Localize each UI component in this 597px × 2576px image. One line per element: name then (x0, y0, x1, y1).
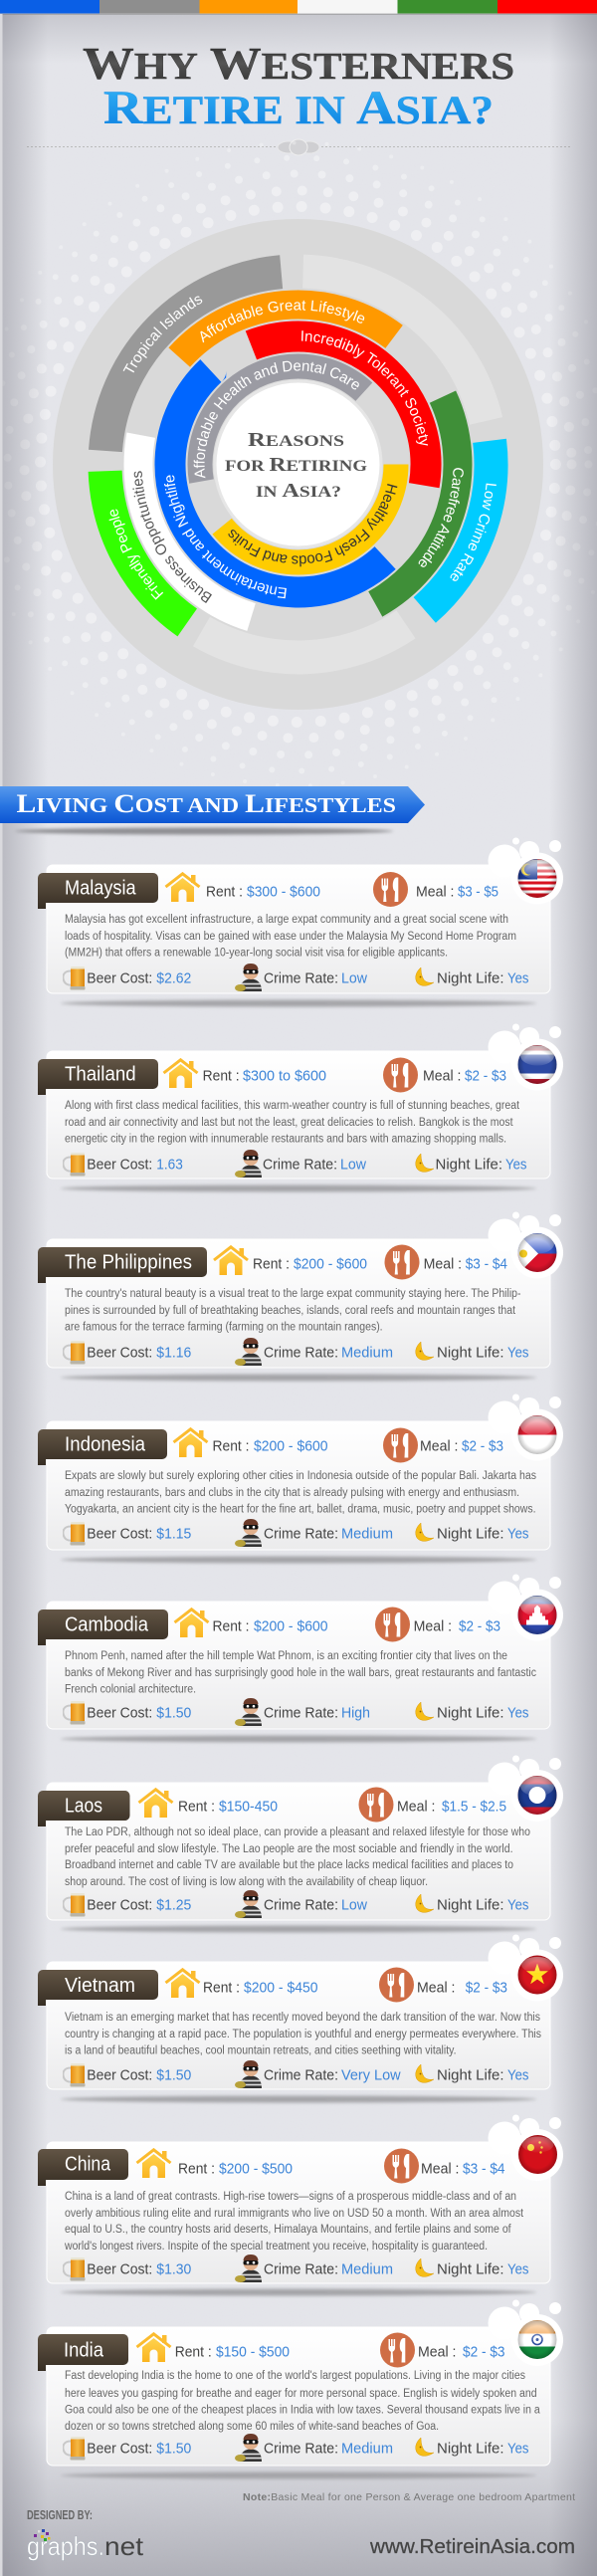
halftone dots background (0, 143, 597, 786)
description (65, 1288, 521, 1334)
stats row: Night Life: (437, 1897, 503, 1913)
stats row: $1.50 (156, 2441, 191, 2457)
stats row: Low (340, 1157, 366, 1173)
description (65, 1470, 536, 1515)
rent: Rent : (203, 1979, 240, 1997)
stats row (63, 1519, 529, 1547)
description: Expats are slowly but surely exploring other cities in Indonesia outside of the popular Bali. Jakarta has (65, 1470, 536, 1482)
flag: Thailand (517, 1045, 557, 1085)
rent: $150-450 (219, 1798, 278, 1816)
ring segment: Affordable Health and Dental Care: Affordable Health and Dental Care (193, 360, 359, 478)
meal (379, 1967, 507, 2003)
flag: Cambodia (517, 1595, 557, 1634)
stats row (63, 964, 529, 991)
rent (163, 1060, 326, 1088)
description: equal to U.S., the country hosts arid deserts, Himalaya Mountains, and fertile plains and some of (65, 2224, 511, 2236)
rent (173, 1429, 328, 1457)
stats row: Beer Cost: (87, 1897, 152, 1913)
description: Vietnam is an emerging market that has recently moved beyond the dark transition of the war. Now this (65, 2012, 540, 2024)
stats row: Crime Rate: (263, 1157, 337, 1173)
meal: $2 - $3 (459, 1618, 500, 1634)
rent: Rent : (206, 884, 243, 900)
meal (375, 1607, 500, 1642)
stats row: $1.50 (156, 1704, 191, 1722)
rent: $150 - $500 (216, 2343, 290, 2361)
meal (358, 1788, 506, 1822)
card: Vietnam (38, 1935, 563, 2102)
description: China is a land of great contrasts. High-rise towers—signs of a prosperous middle-class and of an (65, 2191, 516, 2203)
description: Phnom Penh, named after the hill temple Wat Phnom, is an exciting frontier city that lives on the (65, 1650, 507, 1662)
stats row: Crime Rate: (264, 2066, 338, 2084)
meal: Meal : (416, 884, 454, 900)
meal: Meal : (421, 2160, 460, 2178)
name tab (38, 1059, 158, 1095)
meal: Meal : (397, 1798, 436, 1816)
meal: Meal : (417, 1979, 456, 1997)
ring segment: Low Crime Rate (414, 438, 508, 623)
stats row: $1.50 (156, 2066, 191, 2084)
flag: Indonesia (517, 1415, 557, 1455)
section banner: LIVING COST AND LIFESTYLES (16, 789, 396, 818)
rent: $200 - $450 (244, 1979, 318, 1997)
ring segment: Business Opportunities (123, 432, 256, 631)
card: Thailand (38, 1023, 563, 1192)
logo: graphs.net: graphs. (27, 2531, 104, 2561)
rent (139, 1790, 278, 1818)
stats row: Night Life: (437, 2066, 503, 2084)
description: is a land of beautiful beaches, cool mountain retreats, and cities seething with vitality. (65, 2044, 456, 2056)
name tab: Vietnam (65, 1975, 135, 1997)
description (64, 2191, 524, 2253)
description: road and air connectivity and last but not the least, great delicacies to relish. Bangkok is the most (65, 1117, 513, 1129)
rent: $300 - $600 (247, 884, 320, 900)
stats row: Night Life: (436, 1157, 502, 1173)
meal: $3 - $5 (458, 884, 498, 900)
designed by label: DESIGNED BY: (27, 2507, 93, 2522)
ring segment: Business Opportunities: Business Opportunities (132, 471, 212, 603)
rent: $200 - $600 (254, 1437, 328, 1455)
stats row: Night Life: (437, 969, 503, 987)
rent: $200 - $600 (254, 1618, 328, 1634)
stats row: Crime Rate: (264, 969, 338, 987)
flag: Vietnam (517, 1955, 557, 1995)
stats row: $1.16 (156, 1344, 191, 1362)
meal (380, 2333, 505, 2367)
description: The Lao PDR, although not so ideal place, can provide a pleasant and relaxed lifestyle for those who (65, 1826, 530, 1838)
stats row: Yes (507, 1897, 529, 1913)
stats row: Very Low (341, 2066, 401, 2084)
rent (165, 874, 320, 902)
rent: Rent : (253, 1256, 290, 1272)
rent (165, 1970, 318, 1998)
description (65, 1826, 530, 1888)
description: (MM2H) that offers a renewable 10-year-long social visit visa for eligible applicants. (65, 948, 448, 960)
flag: Malaysia (517, 858, 557, 898)
stats row: Night Life: (437, 1344, 503, 1362)
stats row: Yes (507, 2441, 529, 2457)
card: Malaysia (38, 838, 563, 1007)
stats row: Night Life: (437, 1525, 503, 1543)
ring segment: Friendly People: Friendly People (109, 510, 163, 600)
rent: $300 to $600 (243, 1067, 326, 1085)
meal (384, 1244, 507, 1280)
meal: $2 - $3 (466, 1979, 507, 1997)
rent: Rent : (178, 2160, 215, 2178)
description: overly ambitious ruling elite and rural immigrants who live on USD 50 a month. With an area almost (65, 2208, 524, 2220)
stats row (63, 1338, 529, 1366)
name tab (38, 1610, 168, 1645)
meal (384, 2148, 505, 2184)
meal: Meal : (420, 1437, 458, 1455)
description: here leaves you gasping for breathe and eager for more personal space. English is widely spoken and (65, 2388, 537, 2400)
colour stripe header (0, 0, 597, 15)
description: The country's natural beauty is a visual treat to the large expat community staying here. The Philip- (65, 1288, 521, 1300)
meal (383, 1427, 503, 1463)
stats row (63, 1698, 529, 1726)
stats row: Yes (507, 1525, 529, 1543)
meal: Meal : (424, 1256, 462, 1272)
centre circle: IN ASIA? (256, 480, 341, 502)
stats row: $1.15 (156, 1525, 191, 1543)
name tab: The Philippines (65, 1252, 192, 1274)
description: Yogyakarta, an ancient city is the heart for the fine art, ballet, drama, music, poetry and puppet shows. (65, 1503, 535, 1515)
stats row: Beer Cost: (87, 1157, 152, 1173)
stats row: Crime Rate: (264, 1525, 338, 1543)
ring segment: Affordable Great Lifestyle (169, 291, 403, 367)
name tab: Thailand (65, 1063, 136, 1085)
meal: $3 - $4 (466, 1256, 507, 1272)
chart base disc (53, 219, 543, 710)
stats row (63, 2254, 529, 2282)
card: Laos (38, 1756, 563, 1933)
stats row: Yes (507, 2261, 529, 2277)
description (65, 2012, 541, 2056)
ring segment: Incredibly Tolerant Society (245, 321, 442, 488)
ring segment: Carefree Attitude: Carefree Attitude (418, 468, 464, 567)
rent (137, 2150, 293, 2178)
description: country is changing at a rapid pace. The population is youthful and energy permeates everywhere. This (65, 2029, 541, 2040)
ring segment: Entertainment and Nightlife (155, 359, 396, 607)
card: China (38, 2114, 563, 2295)
name tab (38, 2149, 128, 2186)
stats row: $1.25 (156, 1897, 191, 1913)
flag: China (517, 2134, 557, 2174)
stats row: Yes (507, 1344, 529, 1362)
card: The Philippines (38, 1212, 563, 1382)
title (83, 38, 514, 134)
stats row: Night Life: (437, 2261, 503, 2277)
stats row: Crime Rate: (264, 1344, 338, 1362)
meal: Meal : (418, 2343, 456, 2361)
name tab (38, 1247, 207, 1283)
description: amazing restaurants, bars and clubs in the city that is already pulsing with energy and enthusiasm. (65, 1487, 519, 1499)
meal (373, 872, 498, 907)
meal: $3 - $4 (463, 2160, 505, 2178)
ring segment: Friendly People (88, 470, 197, 637)
stats row: Medium (341, 2441, 393, 2457)
stats row: Crime Rate: (264, 2261, 338, 2277)
name tab: China (65, 2154, 111, 2176)
stats row: High (341, 1704, 370, 1722)
description: are famous for the terrace farming (farming on the mountain ranges). (65, 1322, 383, 1334)
stats row: Beer Cost: (87, 1344, 152, 1362)
rent: $200 - $500 (219, 2160, 293, 2178)
ring segment: Tropical Islands: Tropical Islands (123, 297, 203, 372)
stats row: $2.62 (156, 969, 191, 987)
rent (175, 1610, 328, 1637)
meal: $1.5 - $2.5 (442, 1798, 506, 1816)
description: Malaysia has got excellent infrastructure, a large expat community and a great social scene with (65, 914, 508, 926)
stats row: Medium (341, 1344, 393, 1362)
ring segment: Tropical Islands (89, 255, 283, 452)
description: pines is surrounded by full of breathtaking beaches, islands, coral reefs and mountain ranges that (65, 1305, 516, 1317)
rent: $200 - $600 (294, 1256, 367, 1272)
name tab (38, 1970, 158, 2006)
stats row (63, 1890, 529, 1918)
stats row: Night Life: (437, 1704, 503, 1722)
stats row: Crime Rate: (264, 1704, 338, 1722)
flag: India (517, 2319, 557, 2359)
stats row: Beer Cost: (87, 2441, 152, 2457)
stats row (63, 2434, 529, 2462)
name tab: India (64, 2339, 104, 2361)
centre circle (215, 381, 381, 547)
name tab: Laos (65, 1796, 102, 1818)
stats row (63, 2060, 529, 2088)
description: Goa could also be one of the cheapest places in India with low taxes. Several thousand expats live in a (65, 2405, 540, 2417)
ring segment: Incredibly Tolerant Society: Incredibly Tolerant Society (301, 330, 428, 446)
stats row: Beer Cost: (87, 1704, 152, 1722)
name tab: Cambodia (65, 1614, 149, 1636)
name tab (38, 873, 158, 909)
centre circle: FOR RETIRING (225, 454, 368, 476)
centre circle: REASONS (248, 429, 344, 451)
stats row: Crime Rate: (264, 2441, 338, 2457)
stats row: Crime Rate: (264, 1897, 338, 1913)
description: dozen or so towns stretched along some 60 miles of white-sand beaches of Goa. (65, 2421, 439, 2433)
stats row: Beer Cost: (87, 2066, 152, 2084)
description: Along with first class medical facilities, this warm-weather country is full of stunning beaches, great (65, 1100, 520, 1112)
ring segment: Healthy Fresh Foods and Fruits: Healthy Fresh Foods and Fruits (229, 484, 398, 567)
stats row: Yes (507, 969, 529, 987)
stats row: Beer Cost: (87, 969, 152, 987)
stats row: Night Life: (437, 2441, 503, 2457)
rent: Rent : (213, 1437, 249, 1455)
card: India (38, 2299, 563, 2478)
stats row: Beer Cost: (87, 1525, 152, 1543)
title: RETIRE IN ASIA? (103, 82, 494, 134)
meal: Meal : (423, 1067, 462, 1085)
meal: $2 - $3 (465, 1067, 506, 1085)
description: shop around. The cost of living is low along with the availability of cheap liquor. (65, 1876, 428, 1888)
stats row: $1.30 (156, 2261, 191, 2277)
description: banks of Mekong River and has surprisingly good hole in the wall bars, great restaurants and fantastic (65, 1667, 536, 1679)
description: Fast developing India is the home to one of the world's largest populations. Living in the major cities (65, 2370, 525, 2382)
description (65, 1100, 520, 1145)
name tab (38, 1791, 129, 1826)
pale empty ring segments (30, 196, 566, 733)
divider with ornament (27, 139, 570, 155)
stats row: Yes (507, 2066, 529, 2084)
description (65, 1650, 536, 1696)
rent: Rent : (175, 2343, 212, 2361)
flag: Laos (517, 1776, 557, 1816)
section banner (0, 786, 425, 834)
description: Broadband internet and cable TV are available but the place lacks medical facilities and places to (65, 1859, 513, 1871)
stats row: Beer Cost: (87, 2261, 152, 2277)
description: loads of hospitality. Visas can be gained with ease under the Malaysia My Second Home Program (65, 931, 516, 943)
title: WHY WESTERNERS (83, 38, 514, 89)
logo: graphs.net (27, 2529, 144, 2561)
meal (383, 1057, 506, 1093)
stats row: Medium (341, 1525, 393, 1543)
stats row: Low (341, 969, 367, 987)
logo: graphs.net: net (104, 2531, 144, 2561)
footnote: Note:Basic Meal for one Person & Average one bedroom Apartment (243, 2491, 575, 2503)
rent (137, 2334, 290, 2362)
stats row: Medium (341, 2261, 393, 2277)
meal: $2 - $3 (462, 1437, 503, 1455)
rent: Rent : (213, 1618, 249, 1634)
rent (214, 1247, 367, 1275)
description: prefer peaceful and slow lifestyle. The Lao people are the most sociable and friendly in the world. (65, 1843, 513, 1855)
ring segment: Affordable Great Lifestyle: Affordable Great Lifestyle (200, 301, 364, 342)
ring segment: Carefree Attitude (368, 390, 472, 617)
name tab (38, 1429, 167, 1465)
card: Indonesia (38, 1394, 563, 1563)
name tab: Indonesia (65, 1433, 146, 1455)
description: French colonial architecture. (65, 1684, 196, 1696)
website url: www.RetireinAsia.com (369, 2536, 575, 2558)
description: energetic city in the region with innumerable restaurants and bars with amazing shopping malls. (65, 1133, 506, 1145)
circular reasons chart (53, 219, 543, 710)
flag: Philippines (517, 1232, 557, 1274)
meal: $2 - $3 (463, 2343, 505, 2361)
stats row (63, 1150, 527, 1178)
stats row: Yes (505, 1157, 527, 1173)
description (65, 914, 516, 960)
rent: Rent : (203, 1067, 240, 1085)
name tab (38, 2334, 128, 2371)
stats row: Yes (507, 1704, 529, 1722)
ring segment: Entertainment and Nightlife: Entertainment and Nightlife (164, 475, 287, 599)
stats row: Low (341, 1897, 367, 1913)
rent: Rent : (178, 1798, 215, 1816)
stats row: 1.63 (156, 1157, 183, 1173)
meal: Meal : (414, 1618, 452, 1634)
description (65, 2370, 540, 2433)
ring segment: Low Crime Rate: Low Crime Rate (450, 484, 497, 581)
name tab: Malaysia (65, 878, 136, 900)
description: world's longest rivers. Inspite of the special treatment you receive, hospitality is guaranteed. (64, 2241, 488, 2253)
card: Cambodia (38, 1575, 563, 1742)
